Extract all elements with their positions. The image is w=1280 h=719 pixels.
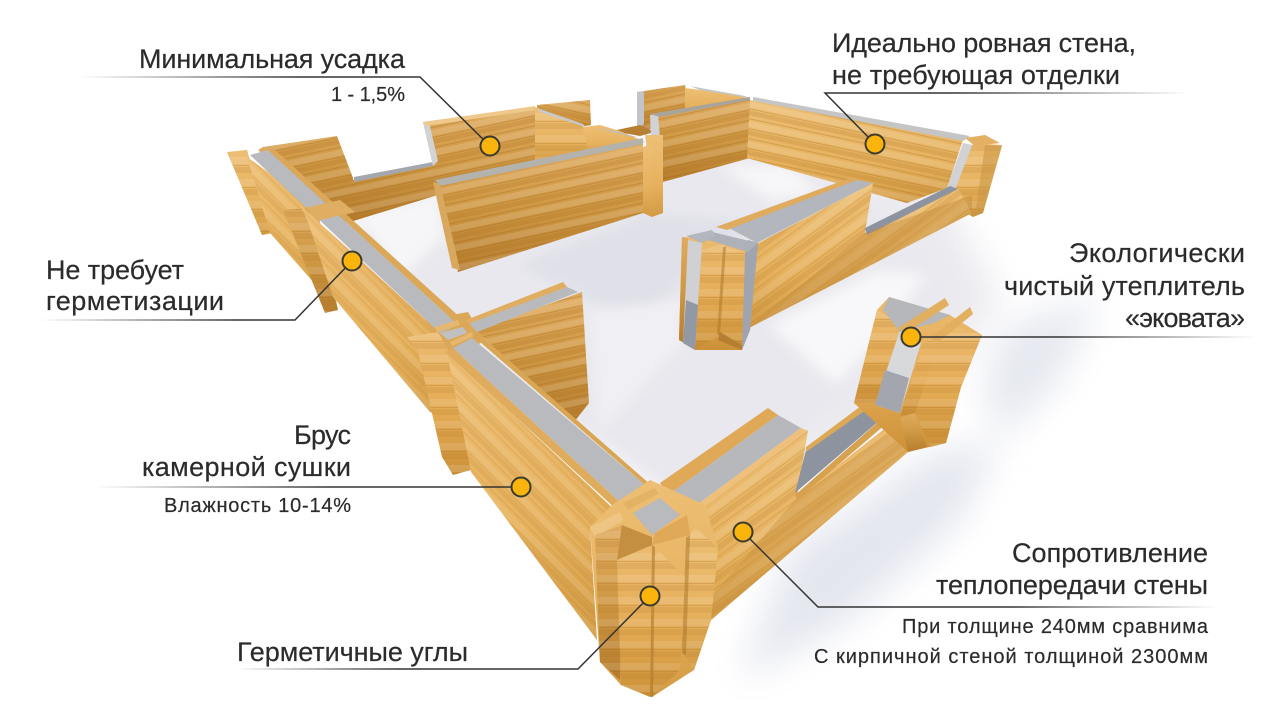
- top insulation strip front run: [445, 333, 652, 511]
- wall: front right: [660, 403, 908, 650]
- top insulation strip first run: [250, 149, 485, 362]
- callout: kiln dried timber: камерной сушки: [142, 452, 351, 482]
- wall: right end posts at the back: [955, 135, 1002, 217]
- post: corner front posts: [617, 545, 685, 697]
- wall: back left with opening: [258, 106, 645, 222]
- callout: kiln dried timber: Влажность 10-14%: [164, 495, 351, 517]
- back wall rear pieces: [537, 85, 750, 136]
- callout: no sealing required: Не требует: [46, 255, 184, 285]
- callout: no sealing required: герметизации: [46, 286, 224, 316]
- post: corner end face: [595, 525, 652, 680]
- callout: no sealing required: [40, 252, 362, 320]
- wall: left section C main: [447, 353, 617, 640]
- callout: perfectly even wall: не требующая отделки: [832, 60, 1120, 90]
- callout: minimal shrinkage: 1 - 1,5%: [331, 84, 405, 106]
- callout: eco insulation: чистый утеплитель: [1004, 271, 1245, 301]
- corner joint block: [590, 480, 718, 697]
- wood: small back return: [637, 85, 690, 132]
- callout: perfectly even wall: Идеально ровная стена,: [832, 28, 1136, 58]
- wall: rear middle: [645, 97, 750, 217]
- callout: minimal shrinkage: Минимальная усадка: [139, 44, 406, 74]
- post: corner right post: [682, 527, 718, 670]
- callout: heat transfer resistance: теплопередачи стены: [936, 570, 1208, 600]
- callout: heat transfer resistance: С кирпичной стеной толщиной 2300мм: [814, 646, 1208, 668]
- callout: eco insulation: «эковата»: [1125, 303, 1245, 333]
- callout: perfectly even wall: [825, 28, 1190, 154]
- wall: inner partition front: [433, 138, 652, 272]
- wall: left section B: [300, 205, 465, 430]
- callout: heat transfer resistance: Сопротивление: [1012, 538, 1208, 568]
- callout: minimal shrinkage: [80, 44, 500, 156]
- wall: left section A: [227, 150, 338, 313]
- floor and shadows: [340, 130, 1100, 680]
- gray insulation at the corner: [633, 498, 680, 535]
- wall: inner partition with central post: [716, 177, 972, 330]
- callout: eco insulation: [902, 238, 1255, 346]
- callout: heat transfer resistance: [734, 522, 1218, 668]
- callout: sealed corners: [235, 586, 660, 669]
- wood: rear offset piece: [537, 100, 591, 135]
- callout: heat transfer resistance: При толщине 240мм сравнима: [902, 616, 1209, 638]
- callout: kiln dried timber: [95, 420, 530, 517]
- post: far right end: [854, 297, 982, 452]
- callout: eco insulation: Экологически: [1069, 238, 1245, 268]
- inner wall near left: [466, 282, 589, 422]
- callout: kiln dried timber: Брус: [294, 420, 351, 450]
- wall: long back wall: [747, 97, 973, 203]
- joint posts left: [407, 332, 471, 475]
- post: central double post: [679, 230, 758, 350]
- callout: sealed corners: Герметичные углы: [237, 637, 468, 667]
